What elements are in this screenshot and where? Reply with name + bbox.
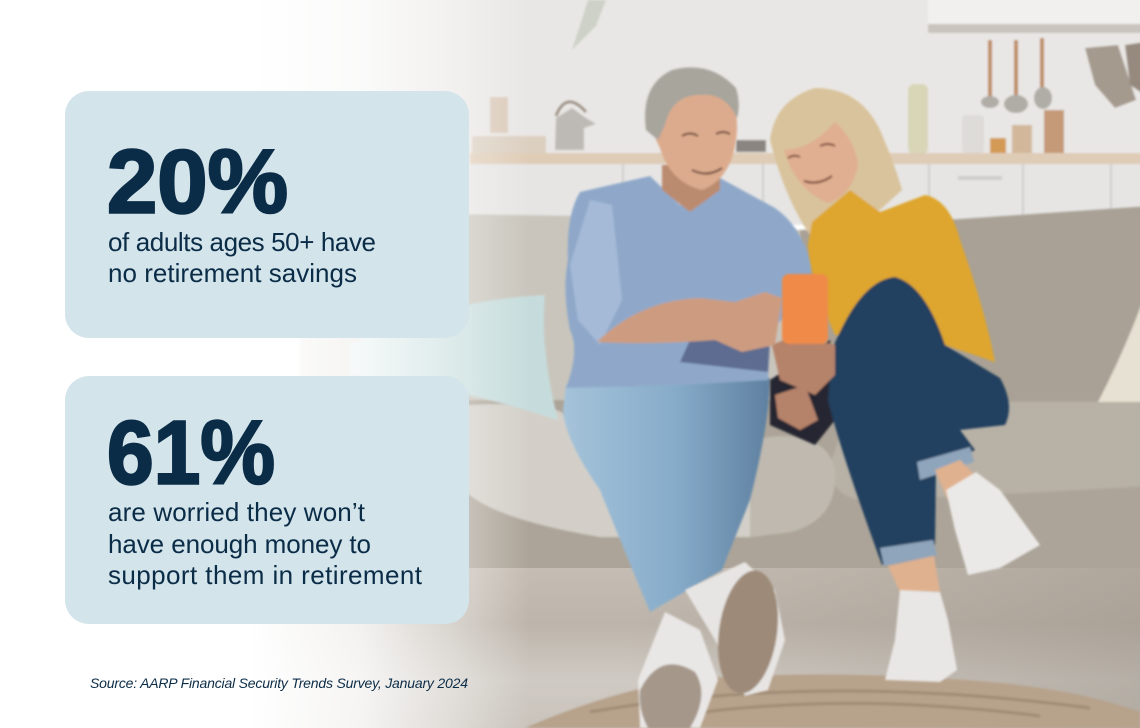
woman hair xyxy=(770,88,902,238)
kitchen background xyxy=(0,0,1140,225)
man trousers xyxy=(563,378,770,612)
rug xyxy=(525,674,1140,728)
sofa xyxy=(300,206,1140,575)
floor xyxy=(0,568,1140,728)
description text xyxy=(108,227,376,288)
man upper sneaker xyxy=(685,562,785,696)
panel: 61 percent stat xyxy=(65,376,469,624)
woman right sneaker xyxy=(946,472,1040,575)
pillow xyxy=(350,295,558,420)
description text xyxy=(108,497,423,590)
man hair xyxy=(645,67,739,140)
description text: are worried they won’t xyxy=(108,497,366,527)
man upper sole xyxy=(711,567,785,697)
man face xyxy=(652,78,737,190)
man lower sneaker xyxy=(638,612,718,728)
woman's hands xyxy=(772,335,835,430)
man shirt xyxy=(565,176,812,388)
big number 61%: 61% xyxy=(107,404,275,504)
man facial features xyxy=(682,132,730,174)
woman xyxy=(770,88,1009,592)
man neck xyxy=(662,165,720,212)
sneakers xyxy=(638,472,1040,728)
woman jeans xyxy=(828,277,1009,565)
source note: Source: AARP Financial Security Trends Survey, January 2024 xyxy=(90,675,468,691)
panel: 20 percent stat xyxy=(65,91,469,338)
woman left sneaker xyxy=(885,590,957,682)
man lower sole xyxy=(640,664,701,728)
woman facial features xyxy=(788,144,835,183)
woman ankles xyxy=(888,460,978,592)
man xyxy=(563,67,812,612)
phone xyxy=(782,274,828,344)
description text: have enough money to xyxy=(108,529,371,559)
description text: no retirement savings xyxy=(108,258,357,288)
panel background xyxy=(65,91,469,338)
dark area between couple xyxy=(770,340,835,445)
woman sweater xyxy=(808,190,995,362)
white fade over left side of photo xyxy=(0,0,530,728)
description text: of adults ages 50+ have xyxy=(108,227,376,257)
woman face xyxy=(784,122,858,203)
description text: support them in retirement xyxy=(108,560,423,590)
big number 20%: 20% xyxy=(107,132,288,232)
panel background xyxy=(65,376,469,624)
jeans cuffs xyxy=(880,447,974,566)
man forearm xyxy=(597,292,782,352)
